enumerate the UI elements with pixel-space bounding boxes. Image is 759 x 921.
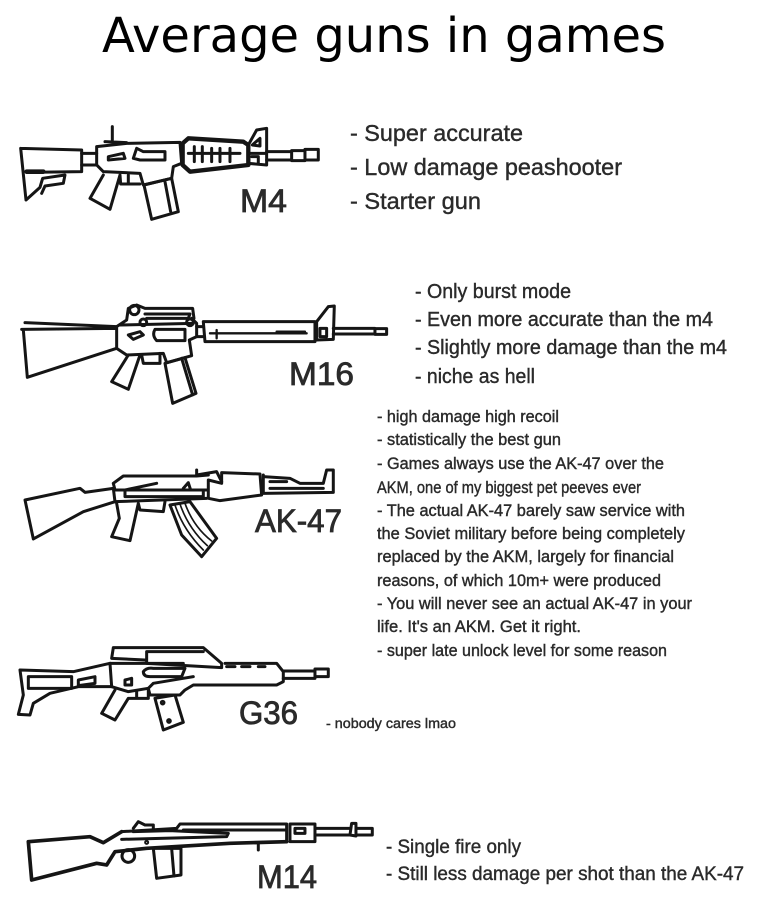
text block: M14 notes [386, 836, 744, 885]
text block: AK-47 notes: reasons, of which 10m+ were produced [377, 572, 661, 590]
text block: M16 notes: - Slightly more damage than the m4 [415, 336, 727, 359]
label: G36: G36 [239, 695, 298, 731]
label: M4: M4 [240, 183, 287, 219]
text block: M4 notes: - Starter gun [350, 188, 481, 214]
panel: M16 [22, 280, 727, 403]
text block: G36 note: - nobody cares lmao [326, 716, 456, 731]
text block: AK-47 notes: - statistically the best gun [377, 431, 561, 449]
text block: M16 notes: - Even more accurate than the m4 [415, 308, 713, 331]
text block: M14 notes: - Single fire only [386, 836, 521, 858]
label: AK-47: AK-47 [255, 503, 342, 539]
text block: AK-47 notes: replaced by the AKM, largely for financial [377, 548, 674, 566]
icon: M14 rifle [28, 822, 372, 880]
text block: AK-47 notes: the Soviet military before being completely [377, 525, 686, 543]
text block: M14 notes: - Still less damage per shot than the AK-47 [386, 863, 744, 885]
panel: G36 [18, 648, 456, 731]
icon: G36 rifle [18, 648, 328, 730]
icon: AK-47 rifle [25, 470, 333, 557]
text block: AK-47 notes: - Games always use the AK-47 over the [377, 455, 664, 473]
panel: M14 [28, 822, 744, 895]
icon: M4 rifle [21, 127, 318, 219]
panel: M4 [21, 120, 622, 219]
text block: M4 notes: - Super accurate [350, 120, 523, 146]
text block: AK-47 notes: - super late unlock level for some reason [377, 642, 667, 660]
text block: AK-47 notes: - high damage high recoil [377, 408, 559, 426]
text block: AK-47 notes: - You will never see an actual AK-47 in your [377, 595, 693, 613]
title: Average guns in games [102, 8, 666, 64]
text block: AK-47 notes: life. It's an AKM. Get it right. [377, 618, 581, 636]
label: M14: M14 [257, 859, 317, 895]
icon: M16 rifle [22, 305, 387, 403]
panel: AK-47 [25, 408, 693, 660]
text block: M16 notes: - niche as hell [415, 365, 535, 388]
text block: AK-47 notes [377, 408, 693, 660]
text block: AK-47 notes: AKM, one of my biggest pet peeves ever [377, 479, 641, 497]
text block: AK-47 notes: - The actual AK-47 barely saw service with [377, 502, 685, 520]
text block: M16 notes [415, 280, 727, 388]
text block: M4 notes: - Low damage peashooter [350, 154, 622, 180]
text block: M4 notes [350, 120, 622, 214]
label: M16: M16 [289, 356, 354, 392]
text block: M16 notes: - Only burst mode [415, 280, 571, 303]
